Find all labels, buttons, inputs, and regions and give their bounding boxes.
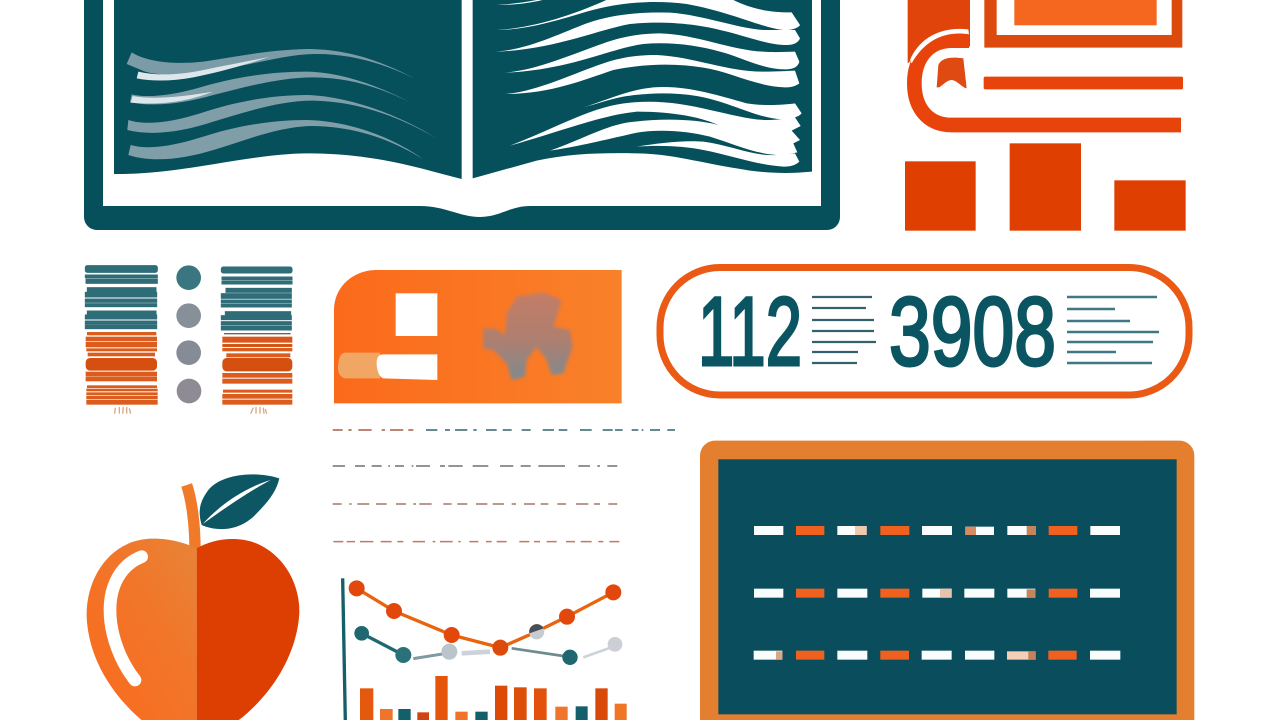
dashed row 4 — [333, 539, 619, 544]
orange card — [334, 270, 622, 403]
bookmark — [937, 58, 967, 88]
dashed row 2 — [333, 464, 617, 468]
number 112: 112 — [698, 277, 802, 386]
apple right half — [197, 539, 299, 720]
open book illustration — [84, 0, 840, 230]
apple icon — [87, 474, 299, 720]
stat pill — [660, 268, 1189, 395]
dot 4 — [177, 379, 201, 403]
progress bar fill — [377, 354, 437, 380]
orange line series — [349, 580, 621, 656]
teal line series — [354, 626, 622, 665]
dashed text rows and chart — [333, 430, 675, 720]
left page — [114, 0, 462, 179]
progress bar track — [338, 353, 380, 378]
card background — [334, 270, 622, 403]
bar 3 — [1114, 180, 1186, 231]
stacked stripe bars with dots — [85, 265, 292, 414]
chart axis — [343, 578, 345, 720]
text lines right — [1067, 297, 1159, 363]
text lines left — [812, 297, 876, 363]
book outer frame — [84, 0, 840, 230]
apple left half — [87, 539, 197, 720]
notebook cover frame — [984, 0, 1182, 48]
apple stem — [187, 485, 195, 550]
board frame — [700, 441, 1194, 720]
notebook spine — [908, 0, 1181, 125]
dot 2 — [176, 303, 201, 328]
dash row 2 — [754, 589, 1120, 598]
chalkboard panel — [700, 441, 1194, 720]
orange notebook icon with bars — [905, 0, 1186, 231]
bar 2 — [1010, 143, 1081, 231]
left stripe column — [85, 266, 157, 414]
number 3908: 3908 — [889, 277, 1056, 386]
pill outline — [660, 268, 1189, 395]
dashed row 1 — [333, 427, 675, 432]
bar series — [360, 676, 627, 720]
dot 1 — [176, 265, 201, 290]
board surface — [718, 459, 1177, 714]
leaf vein — [203, 480, 271, 524]
book white inner — [103, 0, 821, 217]
bar 1 — [905, 161, 976, 231]
apple leaf — [200, 474, 279, 529]
dash row 3 — [754, 651, 1120, 660]
white square — [396, 293, 437, 336]
dot 3 — [176, 340, 201, 365]
apple highlight — [110, 557, 142, 680]
right stripe column — [221, 267, 292, 414]
notebook line — [984, 77, 1183, 89]
puzzle blob — [483, 292, 573, 380]
right page — [473, 0, 812, 178]
dash row 1 — [754, 526, 1120, 535]
notebook label — [1014, 0, 1157, 25]
dashed row 3 — [333, 502, 617, 506]
